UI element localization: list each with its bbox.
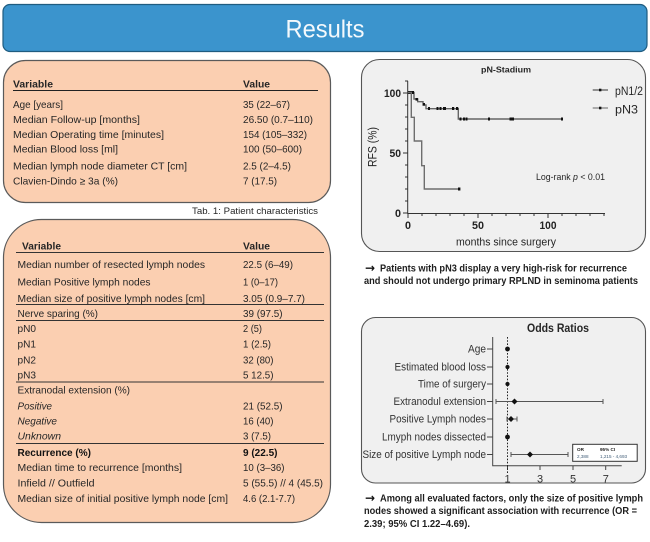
panel: surgical and pathology table: Infield // Outfield [18, 478, 95, 490]
panel: patient characteristics table [4, 60, 330, 202]
x axis labels: 5 [570, 474, 576, 486]
panel: surgical and pathology table: Positive [18, 402, 52, 412]
panel: patient characteristics table: Variable [13, 80, 53, 90]
y axis title: RFS (%) [368, 127, 380, 167]
row labels: Size of positive Lymph node [362, 449, 486, 461]
panel: surgical and pathology table: Extranodal extension (%) [18, 386, 130, 396]
panel: surgical and pathology table: 5 12.5) [243, 370, 274, 382]
panel: surgical and pathology table: pN0 [18, 324, 36, 335]
panel: surgical and pathology table: Median size of initial positive lymph node [cm] [18, 494, 228, 505]
x axis labels: 1 [504, 474, 511, 486]
panel: patient characteristics table: 7 (17.5) [243, 176, 277, 188]
axis tick labels: 50 [472, 220, 484, 232]
chart title: pN-Stadium [481, 64, 531, 74]
conclusion: pN3 [364, 261, 638, 287]
panel: odds ratios forest plot [362, 318, 646, 486]
panel: surgical and pathology table: 39 (97.5) [243, 309, 282, 320]
conclusion: odds ratios [364, 491, 643, 530]
reference line at 1 [506, 337, 508, 473]
panel: surgical and pathology table [4, 220, 330, 522]
header banner [3, 4, 647, 52]
header banner: Results [286, 16, 364, 44]
panel: patient characteristics table: 2.5 (2–4.5) [243, 162, 291, 172]
confidence intervals [496, 399, 603, 457]
axes [487, 337, 622, 470]
axes [403, 81, 605, 218]
panel: surgical and pathology table: 10 (3–36) [243, 463, 284, 474]
axis tick labels: 100 [384, 88, 401, 100]
row labels: Age [468, 344, 486, 356]
panel: surgical and pathology table: 2 (5) [243, 324, 262, 335]
panel: surgical and pathology table: 16 (40) [243, 416, 274, 428]
axis tick labels: 100 [540, 220, 556, 232]
panel: surgical and pathology table: pN1 [18, 340, 36, 350]
inset: odds ratio values: 1,215 - 4,693 [600, 454, 628, 459]
panel: surgical and pathology table: Unknown [18, 432, 61, 442]
x axis title: months since surgery [456, 236, 556, 248]
panel: patient characteristics table: 100 (50–600) [243, 144, 302, 156]
panel: surgical and pathology table: pN2 [18, 356, 36, 366]
axis tick labels: 0 [405, 220, 411, 232]
panel: patient characteristics table: Value [243, 80, 270, 90]
legend: pN1/2 [615, 86, 643, 98]
panel: surgical and pathology table: 32 (80) [243, 356, 274, 366]
panel: surgical and pathology table: pN3 [18, 370, 36, 382]
panel: surgical and pathology table: Variable [22, 242, 61, 252]
point estimates [505, 347, 533, 458]
panel: surgical and pathology table: 21 (52.5) [243, 402, 282, 412]
panel: patient characteristics table: Median Follow-up [months] [13, 115, 140, 126]
panel: surgical and pathology table: 3 (7.5) [243, 432, 271, 442]
panel: patient characteristics table: 26.50 (0.7–110) [243, 115, 313, 126]
panel: surgical and pathology table: Nerve sparing (%) [18, 309, 98, 320]
conclusion: odds ratios: → [365, 491, 375, 505]
axis tick labels: 50 [390, 148, 401, 160]
axis tick labels: 0 [395, 208, 401, 220]
legend: pN3 [615, 104, 638, 116]
panel: patient characteristics table: Median Operating time [minutes] [13, 130, 164, 141]
panel: surgical and pathology table: 1 (0–17) [243, 278, 278, 288]
row labels [362, 344, 487, 461]
conclusion: pN3: Patients with pN3 display a very high-risk for recurrence [380, 264, 627, 274]
panel: surgical and pathology table: 4.6 (2.1-7.7) [243, 494, 295, 505]
log-rank annotation: Log-rank p < 0.01 [536, 172, 605, 183]
curve pN1/2 [408, 91, 563, 120]
panel: surgical and pathology table: Median size of positive lymph nodes [cm] [18, 294, 205, 305]
panel: surgical and pathology table: 22.5 (6–49) [243, 260, 293, 271]
legend [593, 86, 643, 116]
row labels: Extranodul extension [394, 396, 486, 408]
chart title: Odds Ratios [527, 323, 589, 335]
panel: surgical and pathology table: Median Positive lymph nodes [18, 278, 150, 288]
panel: patient characteristics table: 35 (22–67) [243, 100, 290, 111]
panel: surgical and pathology table: Median number of resected lymph nodes [18, 260, 205, 271]
panel: surgical and pathology table: Negative [18, 416, 57, 428]
x axis labels: 7 [603, 474, 609, 486]
panel: surgical and pathology table: Value [243, 242, 270, 252]
conclusion: pN3: → [365, 261, 375, 275]
panel: patient characteristics table: Clavien-Dindo ≥ 3a (%) [13, 176, 118, 188]
row labels: Lmyph nodes dissected [382, 432, 486, 444]
panel: surgical and pathology table: 5 (55.5) // 4 (45.5) [243, 478, 323, 490]
inset: odds ratio values: OR [577, 447, 585, 452]
panel: surgical and pathology table: 3.05 (0.9–7.7) [243, 294, 305, 305]
x axis labels [504, 474, 609, 486]
row labels: Positive Lymph nodes [390, 414, 487, 426]
panel: patient characteristics table: Age [years] [13, 100, 63, 111]
inset: odds ratio values: 95% CI [600, 447, 615, 452]
inset: odds ratio values [573, 444, 637, 461]
panel: patient characteristics table: Median Blood loss [ml] [13, 144, 118, 156]
row labels: Estimated blood loss [394, 362, 487, 374]
panel: surgical and pathology table: 9 (22.5) [243, 448, 278, 459]
panel: patient characteristics table: Median lymph node diameter CT [cm] [13, 162, 187, 172]
table caption: Tab. 1: Patient characteristics [192, 206, 318, 217]
row labels: Time of surgery [418, 378, 487, 390]
curve pN3 [408, 92, 460, 190]
panel: patient characteristics table: 154 (105–332) [243, 130, 307, 141]
inset: odds ratio values: 2,388 [577, 454, 589, 459]
conclusion: odds ratios: 2.39; 95% CI 1.22–4.69). [364, 519, 470, 530]
panel: pN-Stadium survival chart [362, 60, 646, 252]
x axis labels: 3 [537, 474, 543, 486]
panel: surgical and pathology table: Recurrence (%) [18, 448, 91, 459]
panel: surgical and pathology table: 1 (2.5) [243, 340, 271, 350]
axis tick labels [384, 88, 556, 232]
panel: surgical and pathology table: Median time to recurrence [months] [18, 463, 182, 474]
